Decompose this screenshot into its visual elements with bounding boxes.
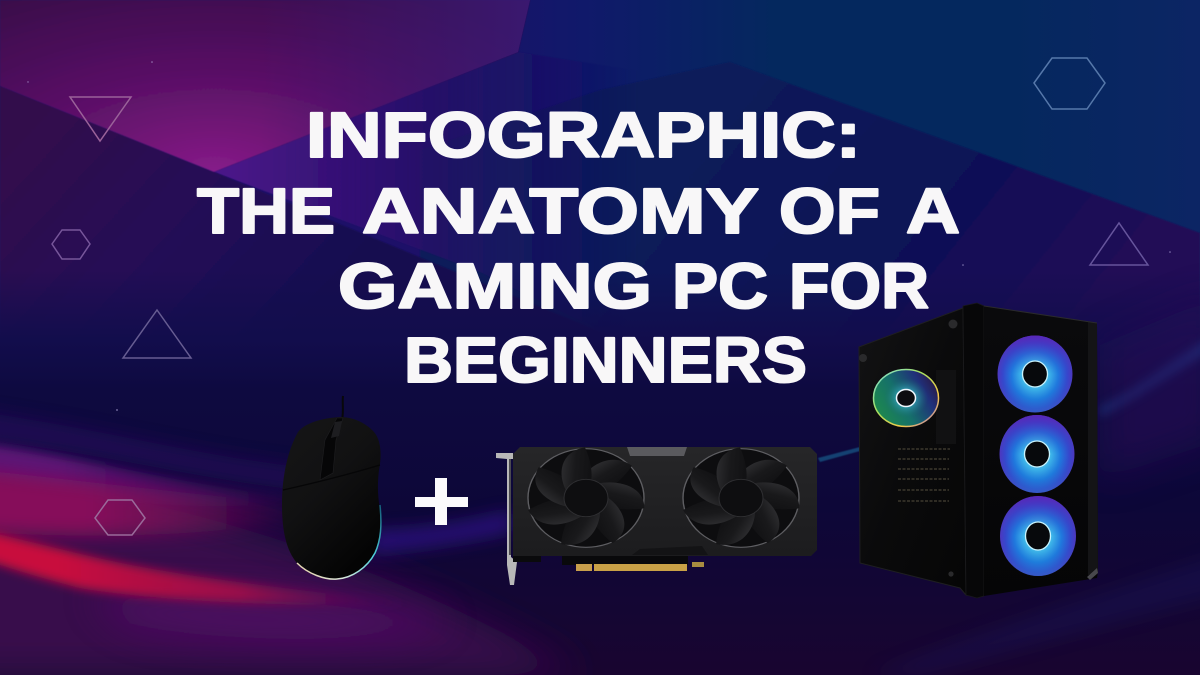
- stars: [27, 61, 1171, 411]
- icon: PC tower: [859, 303, 1098, 598]
- title: BEGINNERS: [404, 324, 807, 396]
- title: FOR: [789, 250, 929, 322]
- shape: triangle right: [1090, 223, 1148, 265]
- shape: small hexagon left: [52, 230, 90, 259]
- title: THE: [197, 175, 335, 247]
- fan 1: [525, 444, 650, 549]
- case left glass panel: [859, 308, 966, 595]
- case screws: [859, 320, 958, 577]
- shape: hexagon lower left: [95, 500, 145, 535]
- title: ANATOMY: [362, 175, 759, 247]
- gold connector: [513, 553, 704, 571]
- front fan bottom: [1000, 496, 1076, 576]
- motherboard detail: [898, 449, 950, 501]
- icon: gaming mouse: [282, 396, 381, 579]
- title: GAMING: [338, 250, 652, 322]
- shape: triangle left: [123, 310, 191, 358]
- bracket: [496, 453, 517, 585]
- card body: [513, 447, 817, 556]
- right-side streaks: [818, 447, 860, 462]
- shape: large hexagon top right: [1034, 58, 1105, 109]
- lower-left wave bands: [0, 470, 580, 675]
- title: OF: [779, 175, 880, 247]
- decorative outline shapes: [52, 58, 1148, 535]
- fan 2: [680, 444, 805, 549]
- icon: graphics card: [496, 444, 817, 585]
- shape: inverted triangle: [70, 97, 131, 141]
- front fan middle: [1000, 415, 1074, 493]
- title: INFOGRAPHIC:: [306, 99, 861, 171]
- case front panel: [984, 306, 1098, 596]
- title: [197, 99, 960, 396]
- case corner pillar: [963, 303, 984, 598]
- front fan top: [998, 336, 1072, 412]
- icon: plus sign: [415, 478, 468, 525]
- RGB side fan: [873, 369, 939, 427]
- title: PC: [672, 250, 768, 322]
- title: A: [906, 175, 960, 247]
